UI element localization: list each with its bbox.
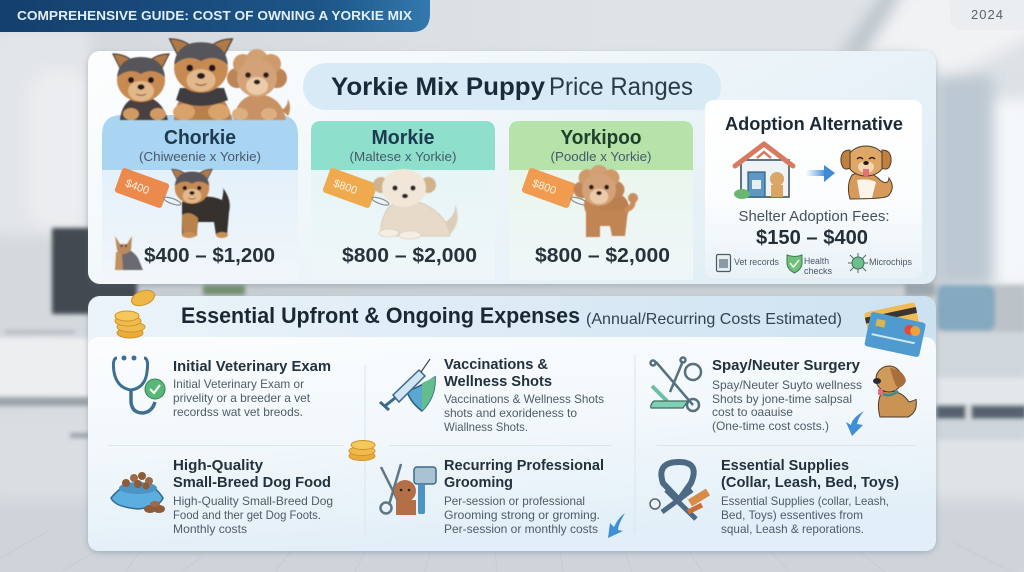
item: vaccinations and wellness shots: Vaccinations & xyxy=(444,356,548,373)
item: dog food: Monthly costs xyxy=(173,522,247,536)
header banner xyxy=(0,0,430,32)
card: Chorkie: Chorkie xyxy=(164,127,236,149)
item: spay neuter surgery: Shots by jone-time salpsal xyxy=(712,392,852,406)
card: Yorkipoo: $800 – $2,000 xyxy=(535,245,670,267)
header banner: COMPREHENSIVE GUIDE: COST OF OWNING A YORKIE MIX xyxy=(17,8,412,23)
price tag: Chorkie $400 xyxy=(114,167,186,215)
item: initial veterinary exam: Initial Veterinary Exam xyxy=(173,358,331,375)
item: spay neuter surgery: (One-time cost costs.) xyxy=(712,419,829,433)
item: essential supplies: squal, Leash & reporations. xyxy=(721,522,864,536)
card: Chorkie: (Chiweenie x Yorkie) xyxy=(139,149,261,164)
card: adoption alternative: Health xyxy=(804,256,829,266)
item: initial veterinary exam: Initial Veterinary Exam or xyxy=(173,377,304,391)
card: adoption alternative: Microchips xyxy=(869,257,912,267)
item: dog food xyxy=(111,457,333,536)
price tag: Yorkipoo $800: $800 xyxy=(531,177,558,197)
icon: surgical tools xyxy=(650,358,701,411)
panel: puppy price ranges xyxy=(88,39,936,284)
icon: syringe and shield xyxy=(380,359,435,411)
heading: (Annual/Recurring Costs Estimated) xyxy=(586,311,842,328)
card: Yorkipoo xyxy=(509,121,693,280)
item: initial veterinary exam: privelity or a breeder a vet xyxy=(173,391,311,405)
price tag: Yorkipoo $800 xyxy=(521,167,593,215)
price tag: Morkie $800: $800 xyxy=(332,177,359,197)
puppy: Chorkie standing xyxy=(172,169,230,238)
heading xyxy=(181,303,842,328)
item: spay neuter surgery: cost to oaauise xyxy=(712,405,793,419)
icon: gold coins middle xyxy=(349,440,375,460)
card: Yorkipoo: Yorkipoo xyxy=(560,127,642,149)
icon: grooming scissors, brush and dog xyxy=(380,464,436,515)
heading: Essential Upfront & Ongoing Expenses xyxy=(181,303,580,328)
item: essential supplies: Essential Supplies (collar, Leash, xyxy=(721,494,889,508)
item: vaccinations and wellness shots: Vaccinations & Wellness Shots xyxy=(444,392,604,406)
item: recurring professional grooming: Grooming xyxy=(444,474,513,491)
item: spay neuter surgery xyxy=(650,357,862,433)
price tag: Morkie $800 xyxy=(322,167,394,215)
item: essential supplies xyxy=(650,457,899,536)
icon: shelter house xyxy=(734,144,793,199)
puppy: Morkie sitting xyxy=(373,169,458,239)
item: recurring professional grooming xyxy=(380,457,604,536)
title pill: Price Ranges xyxy=(549,73,693,101)
arrow: blue swoosh near spay neuter xyxy=(846,411,864,436)
dividers xyxy=(108,355,916,533)
icon: stethoscope xyxy=(113,356,165,413)
item: recurring professional grooming: Per-session or professional xyxy=(444,494,585,508)
card: adoption alternative xyxy=(705,100,922,278)
item: dog food: Small-Breed Dog Food xyxy=(173,474,331,491)
item: essential supplies: Bed, Toys) essentives from xyxy=(721,508,863,522)
puppies on top of Chorkie card xyxy=(113,39,290,120)
item: spay neuter surgery: Spay/Neuter Suyto wellness xyxy=(712,378,862,392)
item: recurring professional grooming: Recurring Professional xyxy=(444,457,604,474)
item: recurring professional grooming: Grooming strong or groming. xyxy=(444,508,600,522)
icon: gold coins top xyxy=(115,287,157,338)
card: adoption alternative: Vet records xyxy=(734,257,779,267)
floor boards xyxy=(0,530,1010,572)
item: initial veterinary exam xyxy=(113,356,331,419)
item: spay neuter surgery: Spay/Neuter Surgery xyxy=(712,357,861,374)
card: Morkie xyxy=(311,121,495,280)
year tab: 2024 xyxy=(971,7,1003,22)
arrow: blue swoosh near grooming xyxy=(608,513,625,538)
item: essential supplies: (Collar, Leash, Bed, Toys) xyxy=(721,474,899,491)
card: adoption alternative: Adoption Alternative xyxy=(725,114,903,134)
icon: microchip xyxy=(848,253,868,273)
icon: happy puppy xyxy=(841,146,892,199)
card: Morkie: Morkie xyxy=(372,127,434,149)
item: recurring professional grooming: Per-session or monthly costs xyxy=(444,522,598,536)
price tag: Chorkie $400: $400 xyxy=(124,177,151,197)
card: Morkie: (Maltese x Yorkie) xyxy=(350,149,456,164)
card: Chorkie xyxy=(102,115,298,280)
card: adoption alternative: Shelter Adoption Fees: xyxy=(738,208,890,225)
icon: credit cards xyxy=(864,302,926,357)
item: vaccinations and wellness shots: Wellness Shots xyxy=(444,373,552,390)
card: adoption alternative: $150 – $400 xyxy=(756,227,868,249)
item: vaccinations and wellness shots xyxy=(380,356,604,434)
icon: sitting dog xyxy=(873,366,916,417)
item: initial veterinary exam: recordss wat vet breods. xyxy=(173,405,303,419)
panel: upfront and ongoing expenses xyxy=(88,287,936,551)
icon: vet records xyxy=(716,254,730,272)
card: Chorkie: $400 – $1,200 xyxy=(144,245,275,267)
small yorkie beside Chorkie price xyxy=(115,236,143,270)
item: dog food: High-Quality Small-Breed Dog xyxy=(173,494,333,508)
item: essential supplies: Essential Supplies xyxy=(721,457,849,474)
icon: dog bowl xyxy=(111,472,165,513)
arrow: shelter to puppy xyxy=(806,165,835,182)
title pill xyxy=(303,63,721,110)
puppy: Yorkipoo standing xyxy=(574,165,638,237)
icon: health shield xyxy=(787,255,802,273)
card: Morkie: $800 – $2,000 xyxy=(342,245,477,267)
title pill: Yorkie Mix Puppy xyxy=(331,73,545,101)
item: vaccinations and wellness shots: shots and exorideness to xyxy=(444,406,577,420)
card: adoption alternative: checks xyxy=(804,266,832,276)
icon: collar and leash xyxy=(650,462,708,519)
item: dog food: Food and ther get Dog Foots. xyxy=(173,508,321,522)
item: dog food: High-Quality xyxy=(173,457,264,474)
year tab xyxy=(950,0,1024,30)
item: vaccinations and wellness shots: Wiallness Shots. xyxy=(444,420,528,434)
card: Yorkipoo: (Poodle x Yorkie) xyxy=(550,149,652,164)
